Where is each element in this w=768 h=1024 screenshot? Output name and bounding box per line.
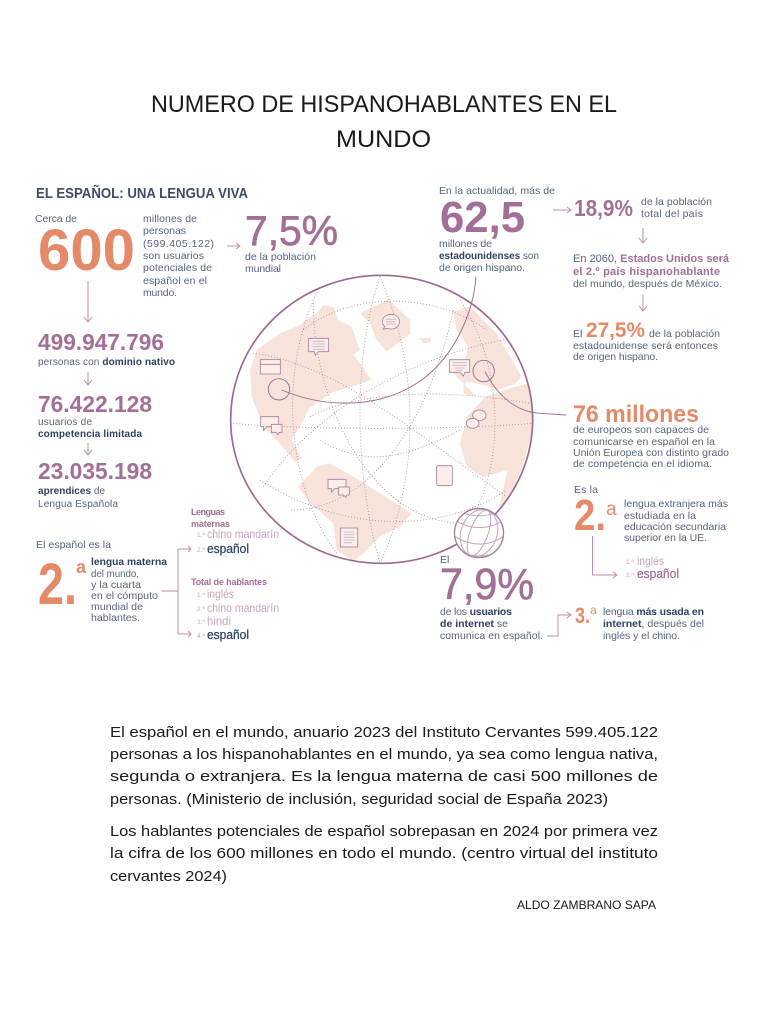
panel: 2.a lengua materna: 2. xyxy=(38,552,77,617)
number: 600: 600 xyxy=(38,218,135,283)
panel: competencia limitada: 76.422.128 xyxy=(38,391,152,417)
title xyxy=(151,91,617,153)
panel: total de hablantes: 1.ª xyxy=(197,592,205,599)
arrow to 7,5% xyxy=(227,243,240,249)
panel: 2.a lengua extranjera: a xyxy=(606,499,617,520)
panel: 3.a lengua internet: inglés y el chino. xyxy=(603,630,680,642)
description: usuarios potenciales: son usuarios xyxy=(143,250,204,262)
icon: chat bubbles North America xyxy=(261,417,282,435)
icon: small wire globe xyxy=(454,508,504,558)
panel: lenguas maternas: español xyxy=(207,541,249,556)
panel: total de hablantes: 3.ª xyxy=(197,619,205,626)
arrow down from 600 xyxy=(84,281,92,322)
panel: 2.a lengua extranjera xyxy=(574,484,728,544)
panel: 600 millones xyxy=(35,213,214,299)
description: usuarios potenciales xyxy=(143,213,214,299)
panel: 76 millones: comunicarse en español en la xyxy=(573,436,715,448)
panel: 76 millones: de europeos son capaces de xyxy=(573,424,709,436)
panel: 2.a lengua extranjera: superior en la UE. xyxy=(624,532,707,544)
panel: lenguas maternas: chino mandarín xyxy=(207,527,279,541)
panel: 62,5 millones: estadounidenses son xyxy=(439,251,539,262)
description: usuarios potenciales: (599.405.122) xyxy=(143,238,214,250)
panel: competencia limitada: competencia limitada xyxy=(38,429,142,440)
panel: 3.a lengua internet xyxy=(575,603,704,642)
panel: 2.a lengua materna: en el cómputo xyxy=(91,591,158,602)
panel: 62,5 millones: millones de xyxy=(439,238,492,250)
panel: total de hablantes: español xyxy=(207,627,249,642)
panel: foreign language ranking: inglés xyxy=(637,554,664,568)
panel: lenguas maternas: 2.ª xyxy=(197,547,205,554)
panel: 62,5 millones: 62,5 xyxy=(440,193,525,242)
panel: aprendices: Lengua Española xyxy=(38,499,118,510)
panel: lenguas maternas: 1.ª xyxy=(197,532,205,539)
icon: document bubble xyxy=(309,338,329,355)
panel: foreign language ranking: 1.ª xyxy=(626,559,634,566)
icon: document xyxy=(340,528,358,547)
panel: 18,9%: total del país xyxy=(641,208,703,220)
panel: 76 millones: de competencia en el idioma. xyxy=(573,458,712,470)
panel: 2.a lengua extranjera: 2. xyxy=(574,491,606,540)
connector to language rankings xyxy=(162,546,191,637)
icon: browser window xyxy=(260,360,280,374)
panel: foreign language ranking xyxy=(626,554,679,581)
panel: 76 millones: Unión Europea con distinto grado xyxy=(573,447,729,459)
panel: 18,9%: 18,9% xyxy=(574,195,633,221)
panel: 7,9%: comunica en español. xyxy=(440,630,543,642)
connector to foreign language ranking xyxy=(592,536,617,578)
callout: Europe line xyxy=(473,360,566,415)
panel: 2.a lengua extranjera: estudiada en la xyxy=(624,510,696,522)
icon: speech bubble on Greenland xyxy=(382,314,400,329)
panel: 3.a lengua internet: lengua más usada en xyxy=(603,606,704,618)
panel: 7,9%: de internet se xyxy=(440,618,508,630)
panel: 7,5%: 7,5% xyxy=(245,207,338,254)
panel: lenguas maternas xyxy=(191,507,279,556)
body paragraph 2: cervantes 2024) xyxy=(110,868,227,885)
panel: 2.a lengua extranjera: educación secundaria xyxy=(624,521,726,533)
body paragraph 2: Los hablantes potenciales de español sobrepasan en 2024 por primera vez xyxy=(110,823,658,840)
panel: 27,5%: 27,5% xyxy=(586,319,645,342)
connector to 3.a xyxy=(547,612,571,636)
icon: chat bubbles Africa xyxy=(466,410,486,428)
panel: total de hablantes: 2.ª xyxy=(197,606,205,613)
arrow down xyxy=(84,443,92,455)
panel: foreign language ranking: español xyxy=(637,566,679,581)
panel: aprendices xyxy=(38,458,152,510)
panel: lenguas maternas: Lenguas xyxy=(191,507,225,517)
arrow down xyxy=(84,372,92,385)
author: ALDO ZAMBRANO SAPA xyxy=(517,900,656,912)
panel: 2.a lengua materna: a xyxy=(76,557,87,577)
panel: 2060 xyxy=(573,253,730,290)
panel: 2.a lengua materna: mundial de xyxy=(91,602,143,613)
panel: 2.a lengua materna xyxy=(36,539,167,624)
graticule xyxy=(233,277,533,563)
panel: competencia limitada: usuarios de xyxy=(38,417,92,428)
title: MUNDO xyxy=(336,126,431,153)
panel: 2060: el 2.º país hispanohablante xyxy=(573,266,720,278)
panel: 18,9%: de la población xyxy=(641,196,712,208)
panel: total de hablantes xyxy=(191,577,279,642)
panel: 2.a lengua materna: hablantes. xyxy=(91,613,140,624)
panel: 27,5%: estadounidense será entonces xyxy=(573,340,718,352)
panel: total de hablantes: Total de hablantes xyxy=(191,577,267,587)
body paragraph 1: personas. (Ministerio de inclusión, seguridad social de España 2023) xyxy=(110,791,608,808)
panel: 2.a lengua extranjera: lengua extranjera más xyxy=(624,498,728,510)
arrow down xyxy=(639,228,647,243)
title: NUMERO DE HISPANOHABLANTES EN EL xyxy=(151,91,617,118)
body paragraph 1: El español en el mundo, anuario 2023 del Instituto Cervantes 599.405.122 xyxy=(110,724,658,741)
panel: 2060: del mundo, después de México. xyxy=(573,278,722,290)
panel: total de hablantes: 4.ª xyxy=(197,633,205,640)
land masses xyxy=(250,299,535,562)
globe map xyxy=(231,275,566,563)
panel: 62,5 millones xyxy=(439,185,555,274)
body paragraph 2: la cifra de los 600 millones en todo el mundo. (centro virtual del instituto xyxy=(110,845,658,862)
panel: 76 millones: 76 millones xyxy=(573,401,699,428)
description: usuarios potenciales: español en el xyxy=(143,275,207,287)
panel: 27,5% xyxy=(573,319,720,363)
body paragraph 2 xyxy=(110,823,658,885)
icon: chat bubbles South America xyxy=(328,479,349,497)
panel: 7,9%: de los usuarios xyxy=(440,606,512,618)
panel: 18,9% xyxy=(574,195,712,221)
arrow down xyxy=(639,295,647,311)
infographic heading: EL ESPAÑOL: UNA LENGUA VIVA xyxy=(36,184,248,202)
panel: 7,9% xyxy=(440,554,543,642)
panel: 2.a lengua extranjera: Es la xyxy=(574,484,598,496)
panel: 2.a lengua materna: El español es la xyxy=(36,539,111,551)
icon: document bubble Europe xyxy=(449,360,470,376)
globe disc xyxy=(231,275,533,563)
description: usuarios potenciales: millones de xyxy=(143,213,197,225)
panel: 600 millones: Cerca de xyxy=(35,213,77,225)
icon: book xyxy=(437,466,452,486)
panel: aprendices: aprendices de xyxy=(38,486,105,497)
panel: 27,5%: El xyxy=(573,328,582,340)
panel: foreign language ranking: 2.ª xyxy=(626,572,634,579)
panel: 2.a lengua materna: lengua materna xyxy=(91,557,167,568)
description: usuarios potenciales: personas xyxy=(143,225,186,237)
panel: 2.a lengua materna: del mundo, xyxy=(91,569,139,580)
infographic xyxy=(35,184,730,642)
body paragraph 1 xyxy=(110,724,658,808)
panel: 7,9%: 7,9% xyxy=(440,560,534,609)
panel: 3.a lengua internet: a xyxy=(590,603,597,617)
panel: aprendices: 23.035.198 xyxy=(38,458,152,484)
panel: total de hablantes: hindi xyxy=(207,614,231,628)
panel: total de hablantes: chino mandarín xyxy=(207,601,279,615)
panel: 2.a lengua materna: y la cuarta xyxy=(91,580,141,591)
panel: 7,5%: de la población xyxy=(245,251,316,263)
globe outline xyxy=(231,275,533,563)
panel: competencia limitada xyxy=(38,391,152,440)
panel: 2060: En 2060, Estados Unidos será xyxy=(573,253,730,265)
body paragraph 1: personas a los hispanohablantes en el mundo, ya sea como lengua nativa, xyxy=(110,746,658,763)
panel: 3.a lengua internet: internet, después del xyxy=(603,618,704,630)
panel: 27,5%: de la población xyxy=(649,328,720,340)
body paragraph 1: segunda o extranjera. Es la lengua materna de casi 500 millones de xyxy=(110,768,658,785)
panel: 76 millones xyxy=(573,401,729,470)
description: usuarios potenciales: mundo. xyxy=(143,287,177,299)
panel: 7,5%: mundial xyxy=(245,263,281,275)
panel: total de hablantes: inglés xyxy=(207,587,234,601)
panel: 62,5 millones: En la actualidad, más de xyxy=(439,185,555,197)
description: usuarios potenciales: potenciales de xyxy=(143,262,212,274)
panel: lenguas maternas: maternas xyxy=(191,519,230,529)
panel: 7,9%: El xyxy=(440,554,449,566)
panel: 7,5% xyxy=(245,207,338,275)
callout: United States line xyxy=(268,277,476,403)
panel: dominio nativo: 499.947.796 xyxy=(38,329,164,355)
panel: dominio nativo: personas con dominio nativo xyxy=(38,357,175,368)
panel: 62,5 millones: de origen hispano. xyxy=(439,262,525,274)
panel: 27,5%: de origen hispano. xyxy=(573,351,658,363)
arrow to 18,9% xyxy=(553,207,571,213)
panel: dominio nativo xyxy=(38,329,175,368)
panel: 3.a lengua internet: 3. xyxy=(575,603,590,628)
